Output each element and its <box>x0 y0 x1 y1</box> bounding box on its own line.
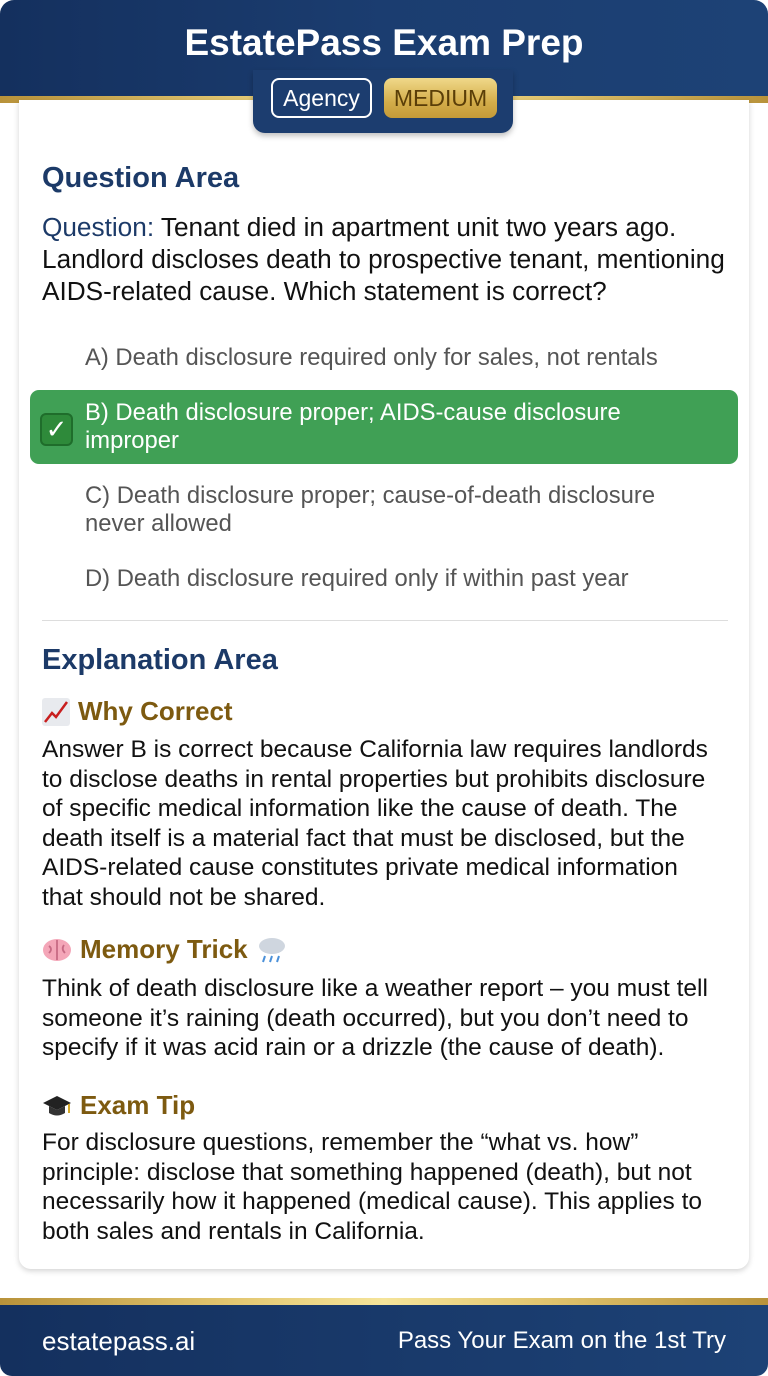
heading: Memory Trick <box>43 934 285 964</box>
option D: D) Death disclosure required only if within past year <box>85 565 629 592</box>
text: why correct: that should not be shared. <box>42 884 325 910</box>
text: memory trick <box>42 975 708 1061</box>
option B text <box>85 399 621 454</box>
badge: MEDIUM <box>384 78 497 118</box>
badge tab <box>253 70 513 133</box>
text: exam tip: principle: disclose that something happened (death), but not <box>42 1158 692 1186</box>
icon: check: ✓ <box>46 414 67 444</box>
option B text: improper <box>85 427 179 454</box>
text: exam tip <box>42 1129 702 1244</box>
footer gold line <box>0 1298 768 1305</box>
text: why correct: of specific medical information like the cause of death. The <box>42 795 678 822</box>
text: exam tip: necessarily how it happened (medical cause). This applies to <box>42 1188 702 1215</box>
header band <box>0 0 768 97</box>
option C: never allowed <box>85 510 232 537</box>
heading: Question Area: Question Area <box>42 162 239 194</box>
text: why correct: death itself is a material fact that must be disclosed, but the <box>42 824 685 852</box>
heading: Memory Trick: Memory Trick <box>80 934 248 964</box>
option C <box>85 482 655 537</box>
text: memory trick: specify if it was acid rain or a drizzle (the cause of death). <box>42 1034 664 1061</box>
text: why correct: AIDS-related cause constitutes private medical information <box>42 854 678 881</box>
heading: Explanation Area: Explanation Area <box>42 644 278 676</box>
option A: A) Death disclosure required only for sales, not rentals <box>85 344 658 371</box>
option B correct <box>30 390 738 464</box>
text: exam tip: For disclosure questions, remember the “what vs. how” <box>42 1129 638 1156</box>
option C: C) Death disclosure proper; cause-of-death disclosure <box>85 482 655 509</box>
option B text: B) Death disclosure proper; AIDS-cause disclosure <box>85 399 621 426</box>
footer right: tagline: Pass Your Exam on the 1st Try <box>398 1327 726 1354</box>
badge: Agency <box>271 78 372 118</box>
heading: Exam Tip: Exam Tip <box>80 1090 195 1120</box>
badge: Agency: Agency <box>283 85 360 111</box>
text: exam tip: both sales and rentals in California. <box>42 1218 425 1244</box>
heading: Why Correct: Why Correct <box>78 696 233 726</box>
header gold line <box>0 96 768 103</box>
icon: check <box>40 413 73 446</box>
text: why correct <box>42 736 708 910</box>
text: memory trick: Think of death disclosure like a weather report – you must tell <box>42 975 708 1002</box>
text: memory trick: someone it’s raining (death occurred), but you don’t need to <box>42 1004 688 1032</box>
question text: Landlord discloses death to prospective tenant, mentioning <box>42 244 725 274</box>
question text: AIDS-related cause. Which statement is correct? <box>42 276 607 306</box>
footer left: site: estatepass.ai <box>42 1326 195 1356</box>
text: why correct: Answer B is correct because California law requires landlords <box>42 736 708 763</box>
footer band <box>0 1305 768 1376</box>
question text: Question: Tenant died in apartment unit two years ago. <box>42 212 676 242</box>
badge: MEDIUM: MEDIUM <box>394 85 487 111</box>
text: why correct: to disclose deaths in rental properties but prohibits disclosure <box>42 766 705 792</box>
title: EstatePass Exam Prep <box>184 22 584 63</box>
question text <box>42 212 725 306</box>
